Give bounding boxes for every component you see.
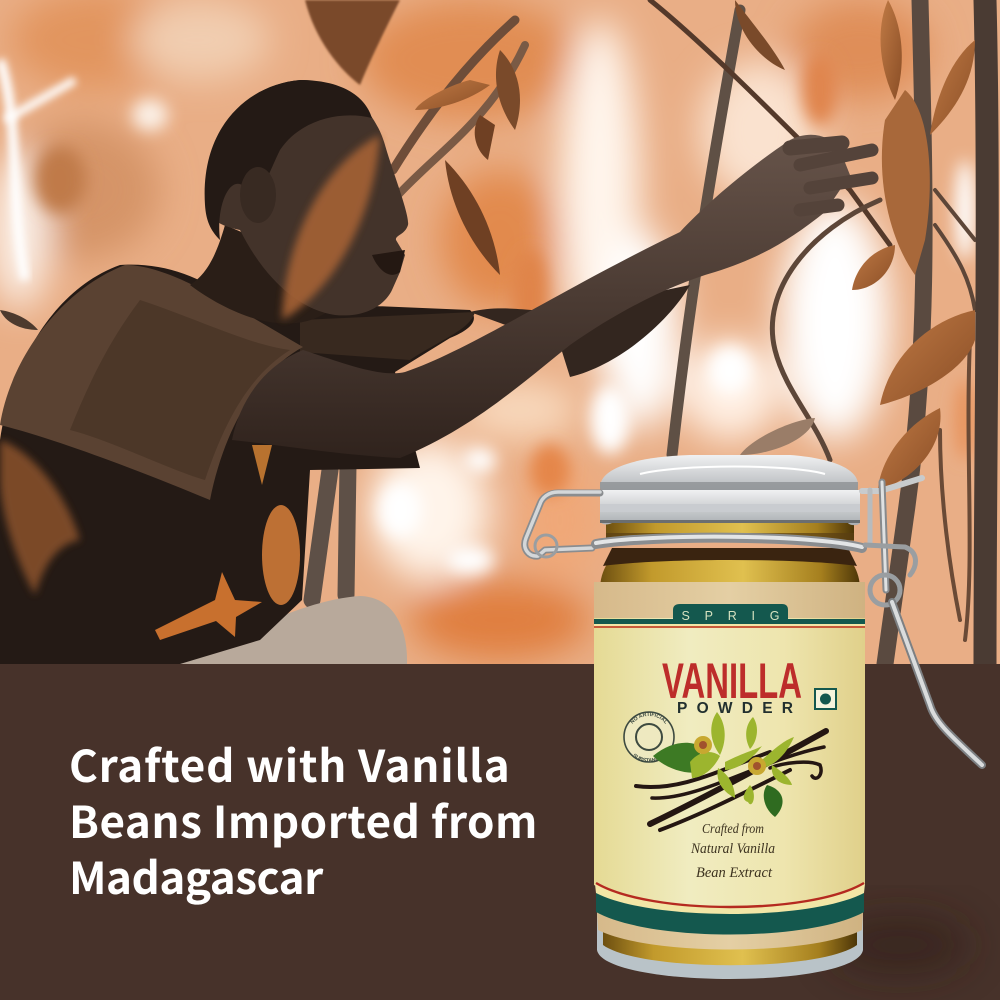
dark brown text band <box>0 664 1000 1000</box>
product name: VANILLA <box>662 653 802 709</box>
brand tab: SPRIG: SPRIG <box>682 609 780 623</box>
t-shirt sleeve <box>0 265 303 500</box>
head <box>205 80 408 315</box>
stamp: no artificial substances: SUBSTANCES <box>633 754 657 762</box>
illustration: vanilla pods and flowers <box>636 712 826 830</box>
farmer <box>0 80 872 664</box>
product name <box>662 653 802 717</box>
script tagline: Bean Extract <box>696 865 773 881</box>
wire clamp <box>525 478 982 765</box>
jar shadow <box>830 915 970 975</box>
script tagline <box>690 821 775 881</box>
arm and hand <box>232 135 850 458</box>
trousers <box>175 596 407 664</box>
label: kraft top <box>594 582 865 622</box>
photo: vanilla farmer picking pods <box>0 0 1000 664</box>
vanilla leaves <box>0 0 975 490</box>
stamp: no artificial substances: NO ARTIFICIAL <box>630 712 666 724</box>
label: cream stripe <box>595 884 865 914</box>
headline: Madagascar <box>69 843 323 907</box>
headline: Crafted with Vanilla <box>69 731 511 795</box>
t-shirt body <box>0 265 474 664</box>
headline <box>69 731 538 907</box>
script tagline: Natural Vanilla <box>690 841 775 857</box>
headline: Beans Imported from <box>69 787 538 851</box>
swing-top lid <box>600 455 860 525</box>
jar body <box>594 518 865 979</box>
neck <box>190 225 330 324</box>
branches and vines <box>312 0 987 664</box>
foreground blurred leaf <box>282 135 380 320</box>
fingers <box>790 143 872 210</box>
far arm <box>470 285 690 377</box>
label: teal stripe <box>596 892 864 934</box>
product name: POWDER <box>677 700 793 717</box>
background foliage <box>0 0 1000 664</box>
t-shirt print <box>155 572 262 640</box>
label: cream body <box>594 618 865 908</box>
gold neck <box>600 550 860 600</box>
base rim <box>597 900 863 979</box>
stamp: no artificial substances <box>623 711 675 763</box>
label: bottom kraft <box>596 895 864 950</box>
brand tab: SPRIG <box>673 604 788 623</box>
label: top stripes <box>594 619 865 624</box>
veg mark <box>815 689 836 709</box>
script tagline: Crafted from <box>702 821 764 836</box>
